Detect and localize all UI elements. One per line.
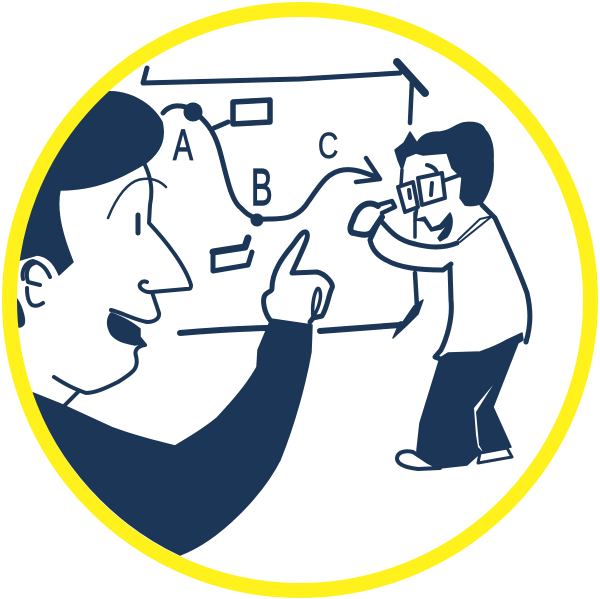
callout box near B	[213, 238, 252, 271]
smiling mouth	[415, 213, 452, 241]
pointing hand	[264, 232, 332, 322]
shirt and body lines	[435, 205, 530, 360]
face line and nose	[401, 170, 417, 221]
label B: B	[251, 159, 273, 217]
callout box near A	[214, 100, 270, 128]
point B marker	[250, 214, 264, 226]
chart on whiteboard	[143, 62, 425, 338]
arms	[370, 221, 457, 270]
chin and jaw	[54, 345, 145, 405]
eyebrow	[108, 179, 166, 218]
curve line with arrow	[163, 106, 380, 219]
glasses	[398, 173, 460, 212]
hair	[395, 122, 493, 206]
eye	[136, 215, 140, 233]
open mouth	[108, 313, 145, 345]
pants	[417, 333, 523, 468]
sweater	[33, 319, 312, 555]
right shoe	[478, 448, 512, 463]
back of neck hair	[17, 298, 26, 328]
left shoe	[397, 451, 440, 469]
pencil and drawing hand	[350, 201, 395, 235]
man in foreground	[0, 80, 332, 555]
point A marker	[184, 102, 202, 122]
hair	[20, 91, 164, 276]
thumb	[313, 288, 321, 317]
label A: A	[173, 120, 194, 169]
collar	[458, 216, 493, 242]
ear	[23, 261, 50, 306]
man at board	[350, 122, 530, 469]
eyes and eyebrow	[409, 165, 437, 198]
chart frame axes	[143, 62, 425, 338]
pants highlight	[474, 385, 493, 452]
face profile with nose	[111, 165, 191, 322]
label C: C	[318, 126, 338, 166]
